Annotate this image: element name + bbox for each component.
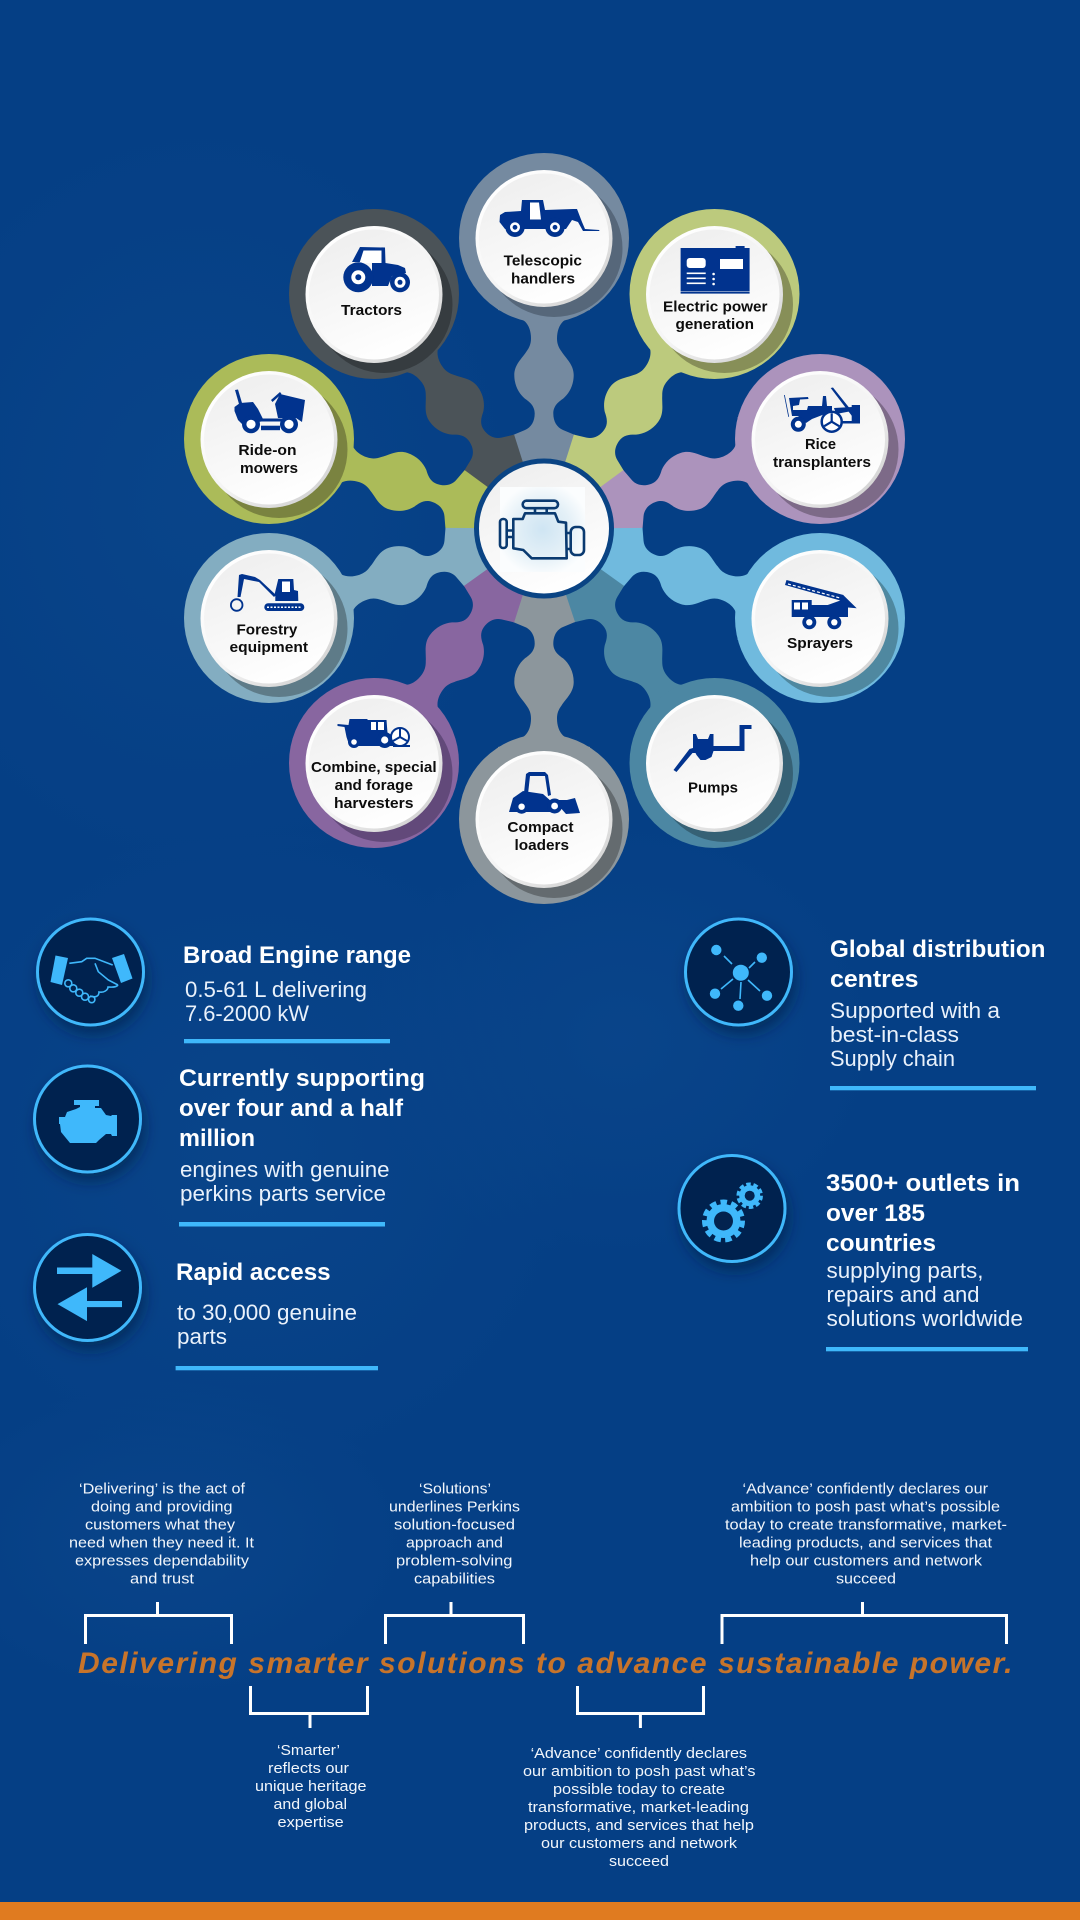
- footer bar: [0, 1902, 1080, 1920]
- label: Compact loaders: loaders: [514, 837, 569, 854]
- heading: million: [179, 1125, 255, 1152]
- text block: Advance explanation top: [725, 1480, 1007, 1588]
- panel: Sprayers: [530, 485, 905, 703]
- text block: Advance explanation bottom: products, and services that help: [524, 1817, 754, 1834]
- panel: Forestry equipment: [184, 485, 558, 703]
- icon: network: [686, 919, 792, 1025]
- heading: Rapid access: [176, 1259, 331, 1286]
- text block: Advance explanation bottom: transformative, market-leading: [528, 1799, 749, 1816]
- text block: Solutions explanation: [389, 1480, 520, 1588]
- heading: Currently supporting: [179, 1065, 425, 1092]
- panel: Ride-on mowers: [184, 354, 558, 572]
- text block: Advance explanation bottom: [523, 1745, 756, 1870]
- heading: over four and a half: [179, 1095, 404, 1122]
- panel: Broad Engine range: [38, 919, 411, 1043]
- text block: Smarter explanation: expertise: [278, 1814, 344, 1831]
- heading: [179, 1065, 425, 1152]
- icon: engine: [34, 1066, 140, 1172]
- text block: Delivering explanation: expresses dependability: [75, 1552, 250, 1570]
- text block: Delivering explanation: need when they need it. It: [69, 1534, 255, 1552]
- icon: ride-on mower: [234, 390, 305, 433]
- panel: Currently supporting: [34, 1065, 425, 1226]
- text block: Solutions explanation: approach and: [406, 1534, 503, 1552]
- label: Telescopic handlers: Telescopic: [504, 253, 582, 270]
- panel: Pumps: [507, 501, 800, 848]
- icon: rice transplanter: [784, 388, 860, 432]
- text block: Smarter explanation: ‘Smarter’: [277, 1742, 340, 1759]
- label: Electric power generation: Electric power: [663, 299, 768, 316]
- text block: 7.6-2000 kW: [185, 1001, 309, 1026]
- bracket: Advance bottom: [578, 1686, 704, 1728]
- text block: Advance explanation bottom: ‘Advance’ confidently declares: [531, 1745, 747, 1762]
- text block: Advance explanation bottom: our ambition to posh past what’s: [523, 1763, 756, 1780]
- label: Sprayers: Sprayers: [787, 635, 853, 652]
- text block: Solutions explanation: underlines Perkins: [389, 1498, 520, 1516]
- label: Forestry equipment: Forestry: [236, 621, 298, 638]
- label: Rice transplanters: Rice: [805, 436, 836, 453]
- text block: Smarter explanation: [255, 1742, 366, 1831]
- icon: handshake: [38, 919, 144, 1025]
- icon: sprayer: [785, 580, 857, 629]
- text block: Delivering explanation: customers what they: [85, 1516, 236, 1534]
- text block: parts: [177, 1324, 227, 1349]
- text block: Smarter explanation: and global: [274, 1796, 347, 1813]
- text block: to 30,000 genuine: [177, 1300, 357, 1325]
- bracket: Solutions: [386, 1602, 524, 1644]
- text block: 0.5-61 L delivering: [185, 977, 367, 1002]
- heading: centres: [830, 966, 918, 993]
- text block: Solutions explanation: solution-focused: [394, 1516, 515, 1534]
- text block: supplying parts,: [826, 1258, 984, 1283]
- panel: Rapid access: [34, 1234, 378, 1370]
- label: Ride-on mowers: [238, 442, 298, 477]
- heading: over 185: [826, 1200, 925, 1227]
- text block: Delivering explanation: [69, 1480, 255, 1588]
- text block: Supported with a: [830, 998, 1001, 1023]
- icon: forestry excavator: [231, 574, 304, 611]
- text block: Advance explanation bottom: our customers and network: [541, 1835, 738, 1852]
- panel: Electric power generation: [507, 209, 800, 556]
- label: Combine, special and forage harvesters: Combine, special: [311, 759, 437, 776]
- icon: telescopic handler: [500, 200, 599, 237]
- heading: countries: [826, 1230, 936, 1257]
- text block: Solutions explanation: ‘Solutions’: [419, 1480, 491, 1498]
- text block: Delivering explanation: doing and providing: [91, 1498, 232, 1516]
- text block: [180, 1157, 390, 1206]
- text block: repairs and and: [826, 1282, 980, 1307]
- icon: tractor: [343, 247, 410, 292]
- panel: Rice transplanters: [530, 354, 905, 572]
- text block: [826, 1258, 1023, 1331]
- panel: Telescopic handlers: [459, 153, 629, 528]
- label: Compact loaders: Compact: [507, 819, 574, 836]
- text block: Advance explanation top: leading products, and services that: [739, 1534, 993, 1552]
- text block: Advance explanation bottom: succeed: [609, 1853, 669, 1870]
- label: Combine, special and forage harvesters: harvesters: [334, 795, 414, 812]
- bracket: Advance top: [722, 1602, 1006, 1644]
- text block: [185, 977, 367, 1026]
- text block: solutions worldwide: [826, 1306, 1023, 1331]
- text block: Advance explanation bottom: possible today to create: [553, 1781, 725, 1798]
- label: Compact loaders: [507, 819, 574, 854]
- title: tagline: Delivering smarter solutions to advance sustainable power.: [78, 1647, 1012, 1680]
- text block: perkins parts service: [180, 1181, 386, 1206]
- icon: central engine hub: [476, 461, 612, 596]
- text block: Advance explanation top: ambition to posh past what’s possible: [731, 1498, 1000, 1516]
- label: Ride-on mowers: Ride-on: [238, 442, 296, 459]
- heading: Broad Engine range: [183, 942, 411, 969]
- text block: Supply chain: [830, 1046, 955, 1071]
- text block: Advance explanation top: help our customers and network: [750, 1552, 983, 1570]
- panel: Combine, special and forage harvesters: [289, 501, 581, 848]
- icon: pump: [674, 725, 752, 772]
- text block: [177, 1300, 357, 1349]
- bracket: Smarter: [250, 1686, 368, 1728]
- label: Tractors: Tractors: [341, 302, 402, 319]
- text block: [830, 998, 1001, 1071]
- panel: Tractors: [289, 209, 581, 556]
- text block: Advance explanation top: today to create transformative, market-: [725, 1516, 1007, 1534]
- label: Pumps: Pumps: [688, 779, 738, 796]
- label: Telescopic handlers: [504, 253, 582, 287]
- heading: [826, 1170, 1020, 1257]
- label: Electric power generation: [663, 299, 768, 333]
- label: Forestry equipment: equipment: [230, 639, 308, 656]
- text block: best-in-class: [830, 1022, 959, 1047]
- text block: engines with genuine: [180, 1157, 390, 1182]
- heading: 3500+ outlets in: [826, 1170, 1020, 1197]
- text block: Solutions explanation: problem-solving: [396, 1552, 512, 1570]
- label: Combine, special and forage harvesters: and forage: [335, 777, 413, 794]
- panel: 3500+ outlets: [679, 1156, 1028, 1351]
- label: Electric power generation: generation: [676, 316, 754, 333]
- heading: Global distribution: [830, 936, 1046, 963]
- label: Rice transplanters: [773, 436, 871, 471]
- text block: Smarter explanation: reflects our: [268, 1760, 349, 1777]
- label: Telescopic handlers: handlers: [511, 270, 575, 287]
- text block: Delivering explanation: ‘Delivering’ is the act of: [79, 1480, 246, 1498]
- text block: Smarter explanation: unique heritage: [255, 1778, 366, 1795]
- icon: compact loader: [509, 772, 580, 814]
- bracket: Delivering: [86, 1602, 232, 1644]
- text block: Solutions explanation: capabilities: [414, 1570, 495, 1588]
- panel: Global distribution centres: [686, 919, 1046, 1090]
- icon: gears: [679, 1156, 785, 1262]
- label: Rice transplanters: transplanters: [773, 454, 871, 471]
- icon: generator: [681, 246, 750, 294]
- text block: Advance explanation top: succeed: [836, 1570, 896, 1588]
- label: Combine, special and forage harvesters: [311, 759, 437, 812]
- label: Ride-on mowers: mowers: [240, 460, 298, 477]
- heading: [830, 936, 1046, 993]
- text block: Advance explanation top: ‘Advance’ confidently declares our: [742, 1480, 988, 1498]
- label: Forestry equipment: [230, 621, 308, 656]
- panel: Compact loaders: [459, 528, 629, 904]
- icon: combine harvester: [338, 719, 410, 748]
- text block: Delivering explanation: and trust: [130, 1570, 195, 1588]
- icon: exchange arrows: [34, 1234, 140, 1340]
